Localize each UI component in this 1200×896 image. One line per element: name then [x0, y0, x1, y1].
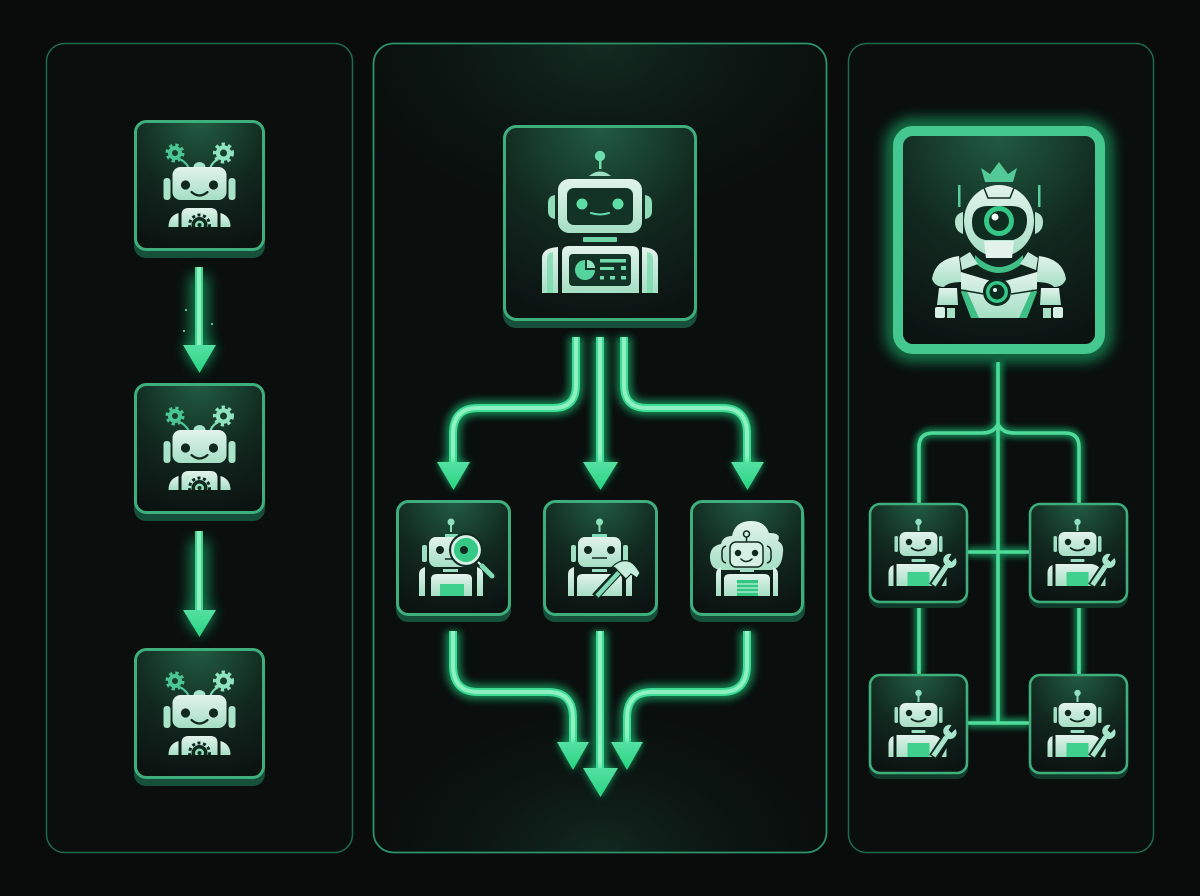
card: top worker robot — [134, 122, 265, 258]
icon: robot with hammer — [568, 518, 640, 597]
connectors and arrows — [437, 337, 764, 797]
connectors — [919, 362, 1079, 723]
card: middle worker robot — [134, 384, 265, 521]
arrow: second to third — [183, 531, 216, 637]
panel: sequential chain — [46, 44, 352, 852]
card: worker top right — [1029, 504, 1128, 608]
card: worker bottom left — [869, 675, 968, 779]
icon: crowned one-eyed robot — [932, 162, 1066, 318]
card: bottom worker robot — [134, 650, 265, 786]
card: cloud robot — [690, 502, 805, 622]
panel: hierarchical supervisor — [848, 44, 1154, 852]
card: worker top left — [869, 504, 968, 608]
arrow: first to second — [183, 267, 216, 373]
card: builder robot — [543, 502, 658, 622]
card: research robot — [396, 502, 511, 622]
card: orchestrator robot — [503, 126, 697, 328]
panel: parallel fan-out — [374, 44, 826, 852]
icon: robot with magnifier — [419, 518, 492, 596]
icon: orchestrator robot with dashboard — [542, 151, 658, 293]
card: worker bottom right — [1029, 675, 1128, 779]
card: supervisor robot — [893, 126, 1105, 354]
icon: robot in cloud — [710, 521, 783, 596]
